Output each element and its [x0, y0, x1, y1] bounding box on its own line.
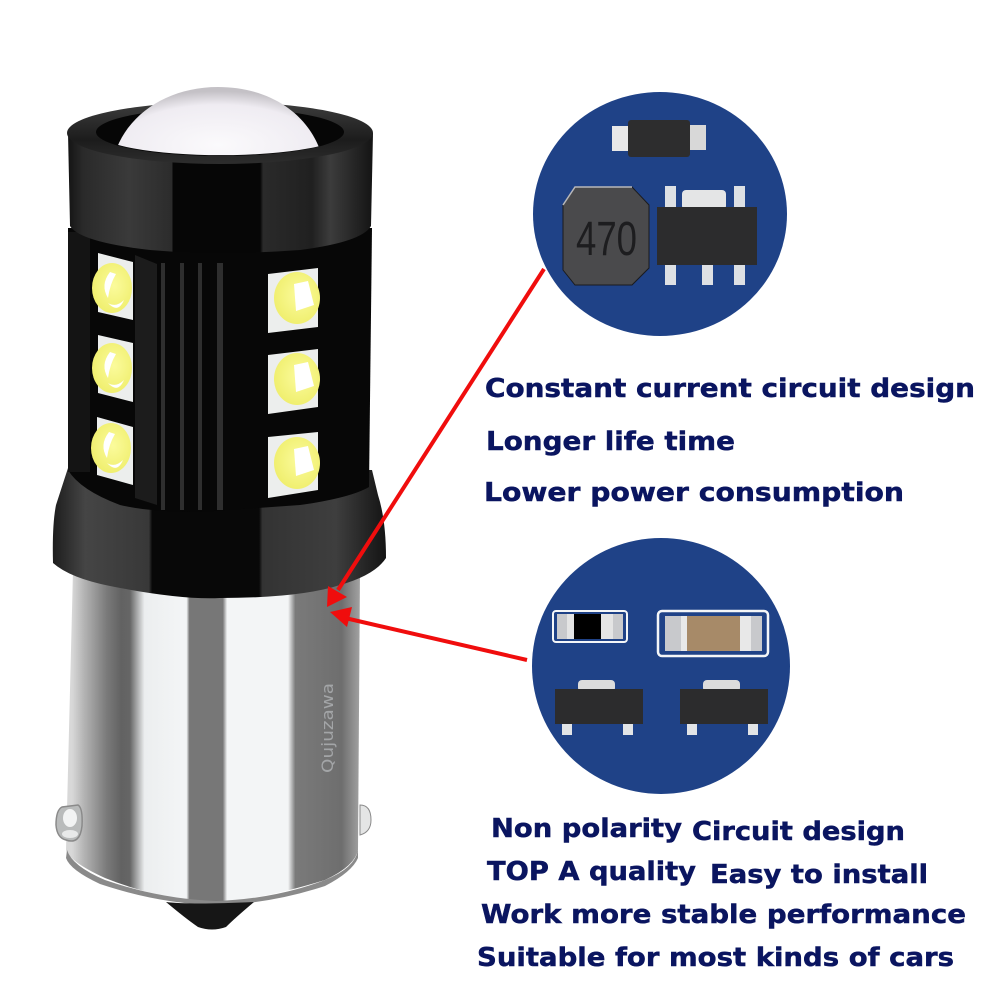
detail circle: passive components: [532, 538, 790, 794]
feature list: top: Constant current circuit design: [485, 374, 975, 404]
cap opening: [96, 108, 344, 156]
lens: [118, 87, 318, 156]
regulator chip: [657, 186, 757, 285]
right transistor: [680, 680, 768, 735]
feature list: bottom: Work more stable performance: [481, 900, 966, 930]
feature list: bottom: Suitable for most kinds of cars: [477, 943, 954, 973]
right led column: [268, 268, 320, 498]
arrow: bottom circle to bulb base: [330, 607, 527, 660]
feature list: top: Longer life time: [486, 427, 735, 457]
led housing: [68, 228, 372, 512]
feature list: top: [484, 374, 975, 508]
left led column: [91, 253, 133, 485]
metal base: [56, 570, 371, 930]
feature list: bottom: TOP A quality: [487, 857, 696, 887]
feature list: top: Lower power consumption: [484, 478, 904, 508]
feature list: bottom: Non polarity: [491, 814, 682, 844]
feature list: bottom: [477, 814, 966, 973]
large capacitor: [658, 611, 768, 656]
feature list: bottom: Circuit design: [692, 817, 905, 847]
small resistor: [553, 611, 627, 642]
diode: [612, 120, 706, 157]
inductor 470: 470: [576, 213, 637, 266]
cap rim: [67, 102, 373, 164]
brand mark: Qujuzawa: [318, 683, 337, 773]
top cap: [67, 87, 373, 253]
detail circle: constant current components: [533, 92, 787, 336]
left transistor: [555, 680, 643, 735]
contact tip: [166, 902, 254, 930]
inductor 470: [563, 187, 649, 285]
left pin: [56, 805, 82, 841]
feature list: bottom: Easy to install: [710, 860, 928, 890]
right pin: [360, 805, 371, 835]
bulb illustration: [53, 87, 386, 930]
arrow: top circle to bulb base: [327, 269, 544, 607]
heat sink ribs: [161, 263, 223, 510]
lower collar: [53, 468, 386, 598]
